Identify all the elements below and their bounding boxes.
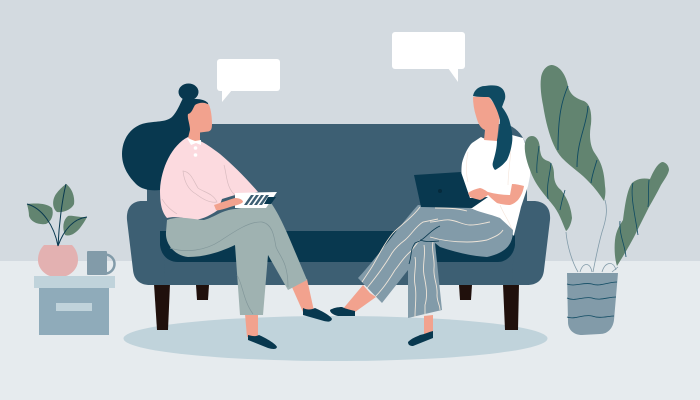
woman right [330, 85, 530, 346]
wall [0, 0, 700, 262]
sofa [127, 124, 550, 330]
woman left [122, 84, 332, 349]
sofa base [150, 250, 525, 285]
shirt folds [466, 140, 512, 230]
mug [87, 251, 114, 275]
face and neck [186, 103, 212, 146]
large leaf [541, 65, 605, 201]
sweater [160, 137, 258, 220]
speech bubble: right [392, 32, 465, 82]
side table with plant and mug [27, 184, 115, 335]
right leaf [615, 162, 669, 266]
shoes [248, 308, 332, 349]
potted plant [27, 184, 87, 276]
lower legs [245, 279, 314, 337]
storage box [39, 288, 109, 335]
hair [122, 84, 209, 190]
speech bubble: left [217, 59, 280, 102]
sofa left arm [127, 201, 165, 285]
trousers [166, 203, 307, 315]
floor plant [525, 65, 669, 335]
arm [468, 184, 524, 205]
trousers [358, 205, 513, 318]
table top [34, 276, 115, 288]
plant stems [566, 200, 618, 272]
laptop [414, 172, 488, 208]
left leaf [525, 136, 572, 231]
sofa front legs [154, 284, 519, 330]
clipboard [235, 192, 277, 208]
plant pot [567, 273, 618, 335]
shoes [330, 307, 433, 346]
sofa backrest [147, 124, 527, 240]
face [473, 96, 500, 141]
sofa seat cushion [160, 231, 515, 262]
sofa back legs [196, 285, 472, 300]
rug [124, 316, 548, 361]
floor [0, 261, 700, 400]
shirt [461, 135, 530, 236]
hair [473, 85, 512, 170]
sofa right arm [512, 201, 550, 285]
lower legs [342, 285, 433, 335]
hand [214, 198, 243, 210]
